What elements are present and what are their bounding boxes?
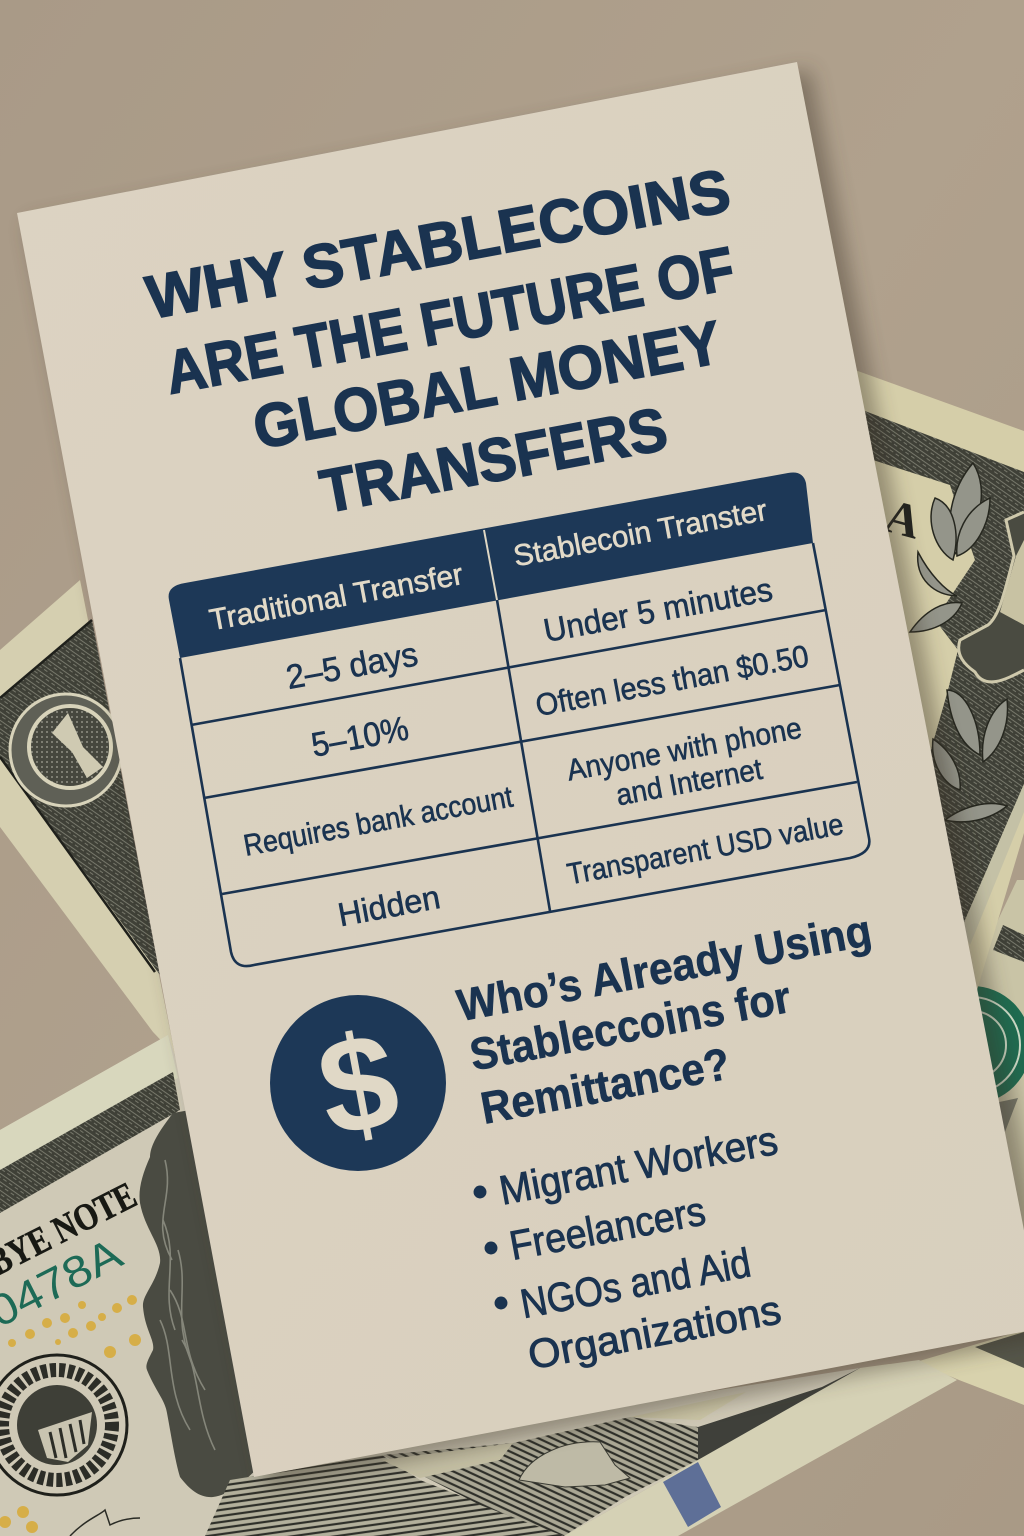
note engraved edge xyxy=(698,1368,870,1460)
table text: Transparent USD value xyxy=(565,808,846,891)
note light strip xyxy=(564,1360,957,1536)
title: GLOBAL MONEY xyxy=(248,308,726,462)
banknote: right lower corner xyxy=(916,1330,1024,1405)
table text: 5–10% xyxy=(308,710,412,765)
portrait hair xyxy=(139,1110,256,1497)
bullet list: NGOs and Aid xyxy=(517,1239,754,1327)
bullet list: Migrant Workers xyxy=(496,1117,781,1214)
comparison table xyxy=(169,472,869,966)
section heading: Remittance? xyxy=(477,1038,734,1134)
title: WHY STABLECOINS xyxy=(141,156,735,332)
engraved border band xyxy=(0,1072,180,1213)
title: ARE THE FUTURE OF xyxy=(160,234,740,407)
table text: Anyone with phone xyxy=(564,712,804,788)
bullet list: Organizations xyxy=(524,1286,784,1378)
bullet list: Freelancers xyxy=(506,1188,709,1269)
banknote: bottom xyxy=(0,1035,957,1536)
gold dots xyxy=(0,1295,141,1533)
table header band xyxy=(169,472,813,658)
table text: Often less than $0.50 xyxy=(533,638,811,723)
note cream patch under card xyxy=(630,1392,746,1420)
banknote: left xyxy=(0,580,175,1055)
table text: Requires bank account xyxy=(241,780,516,863)
section heading xyxy=(453,904,875,1134)
table text: and Internet xyxy=(614,753,766,812)
hair strands xyxy=(160,1160,215,1450)
title xyxy=(141,156,740,526)
table outline and grid xyxy=(180,543,869,966)
banknote: right green seal xyxy=(913,880,1024,1230)
security strip xyxy=(663,1462,721,1527)
icon: dollar coin: $ xyxy=(307,1002,409,1166)
banknote: top right xyxy=(855,370,1024,997)
table text: Under 5 minutes xyxy=(540,570,775,649)
table text: Traditional Transfer xyxy=(207,558,466,637)
note corner letter: A xyxy=(879,489,927,550)
portrait cream patch xyxy=(382,1443,513,1478)
title: TRANSFERS xyxy=(315,394,672,526)
large numeral outline xyxy=(959,512,1024,682)
signature xyxy=(70,1510,140,1536)
section heading: Stableccoins for xyxy=(466,971,795,1080)
section heading: Who’s Already Using xyxy=(453,904,875,1031)
table text: Hidden xyxy=(335,878,443,933)
table text: Stablecoin Transter xyxy=(511,494,770,573)
portrait ear xyxy=(519,1442,630,1487)
table text xyxy=(207,494,846,933)
icon: dollar coin xyxy=(270,995,446,1171)
table text: 2–5 days xyxy=(283,635,421,697)
laurel leaves xyxy=(910,463,1008,822)
federal seal xyxy=(0,1355,127,1495)
header divider xyxy=(484,530,497,600)
portrait shoulder and coat xyxy=(205,1455,564,1536)
bullet list xyxy=(474,1117,784,1378)
